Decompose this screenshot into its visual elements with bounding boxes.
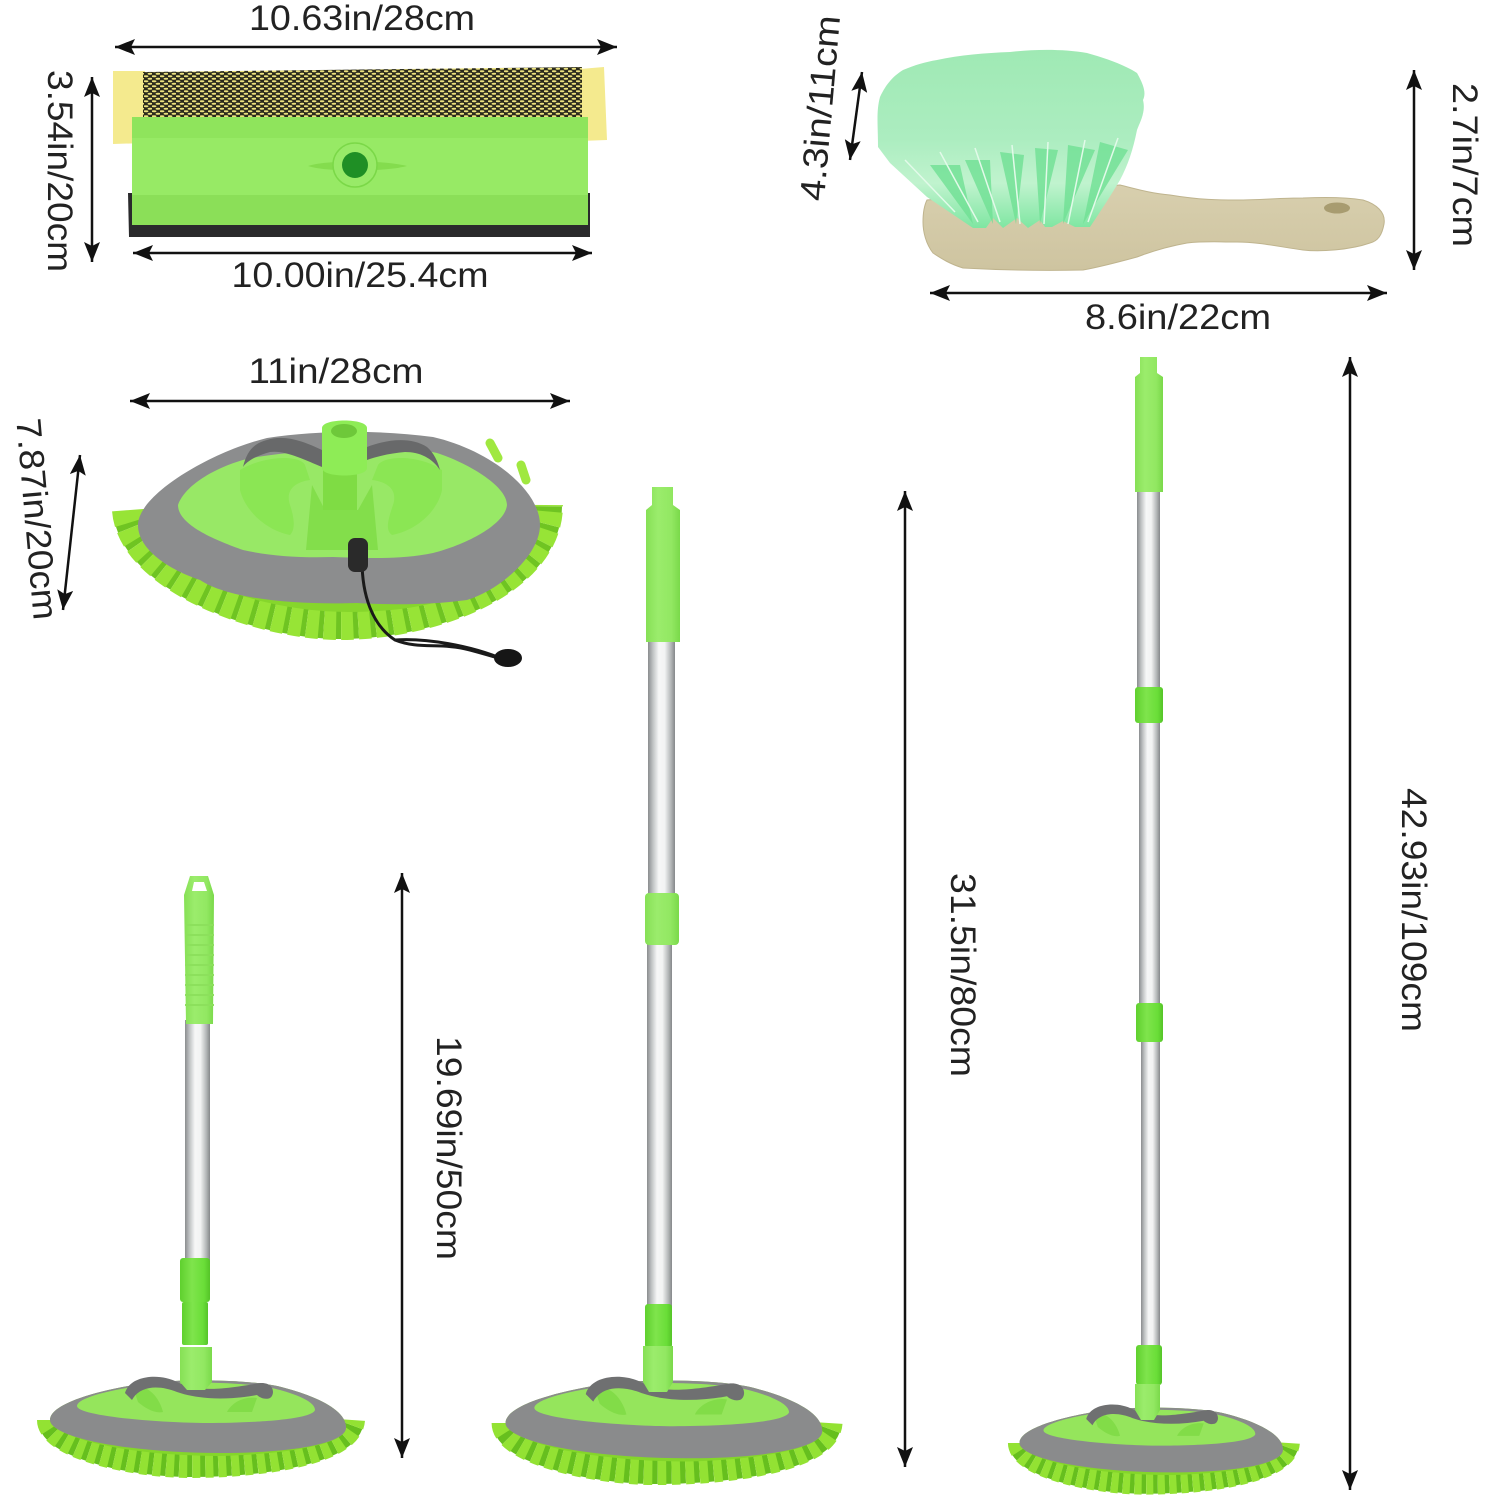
connector lower <box>323 470 357 510</box>
arrow: brush length <box>930 292 1387 294</box>
arrow: medium length <box>904 491 906 1467</box>
silver tube middle <box>1139 720 1160 1005</box>
drawstring cord <box>362 560 505 660</box>
neck <box>643 1346 673 1392</box>
label: squeegee width: 10.63in/28cm <box>249 0 475 38</box>
arrow: bristle height <box>850 72 862 160</box>
chenille base <box>150 540 530 612</box>
grey strap <box>243 438 440 470</box>
label: brush height: 2.7in/7cm <box>1445 83 1484 247</box>
bottom collar <box>1136 1345 1162 1385</box>
neck <box>180 1347 212 1390</box>
label: mop head depth: 7.87in/20cm <box>8 417 65 621</box>
sponge <box>113 67 607 144</box>
grip with loop <box>184 876 214 1024</box>
mop 1: short <box>50 876 352 1465</box>
mop head <box>1020 1405 1288 1483</box>
mop head <box>50 1377 352 1465</box>
silver tube top <box>1137 488 1160 690</box>
arrow: squeegee height <box>91 77 93 262</box>
label: brush length: 8.6in/22cm <box>1085 298 1271 337</box>
arrow: blade width <box>133 252 592 254</box>
panel: flat chenille mop head <box>130 420 545 667</box>
arrow: short length <box>401 873 403 1458</box>
chenille fringe <box>130 505 545 622</box>
label: bristle height: 4.3in/11cm <box>793 14 848 202</box>
label: mop head width: 11in/28cm <box>248 352 424 391</box>
connector hole <box>331 424 357 438</box>
arrow: mop head width <box>130 400 570 402</box>
arrow: mop head depth <box>63 455 80 610</box>
arrow: squeegee width <box>115 46 617 48</box>
green body <box>132 117 588 195</box>
bristle strands <box>905 138 1118 224</box>
upper flange <box>132 117 588 138</box>
stray fringe <box>490 443 526 480</box>
lower collar <box>182 1302 208 1345</box>
cord knot <box>494 649 522 667</box>
silver tube lower <box>647 940 672 1310</box>
handle <box>923 185 1384 270</box>
silver tube <box>648 640 675 900</box>
chenille fringe shadow <box>130 505 545 622</box>
label: medium length: 31.5in/80cm <box>943 873 982 1077</box>
neck <box>1135 1384 1160 1420</box>
mop head <box>506 1377 829 1471</box>
green plate <box>178 449 507 558</box>
label: long length: 42.93in/109cm <box>1394 788 1433 1032</box>
mop 2: medium <box>506 487 829 1471</box>
silver tube lower <box>1141 1040 1160 1348</box>
lower flange <box>132 195 588 225</box>
black rubber blade <box>128 193 590 237</box>
plate raised lobes <box>240 458 442 535</box>
bristles <box>878 50 1144 228</box>
collar <box>645 893 679 945</box>
connector <box>308 143 407 187</box>
plate centre channel <box>306 485 378 550</box>
label: squeegee height: 3.54in/20cm <box>40 70 79 272</box>
arrow: long length <box>1349 357 1351 1490</box>
lower collar <box>645 1304 672 1348</box>
bristle tufts <box>930 142 1128 224</box>
grip <box>646 487 680 642</box>
cord stopper <box>348 538 368 572</box>
label: short length: 19.69in/50cm <box>429 1036 468 1260</box>
label: blade width: 10.00in/25.4cm <box>232 256 488 295</box>
mesh <box>143 67 582 118</box>
grip ribs <box>185 925 214 1005</box>
mop 3: long <box>1020 357 1288 1483</box>
silver tube <box>185 1020 210 1262</box>
handle hole <box>1324 202 1350 214</box>
lower collar <box>1136 1003 1163 1042</box>
connector <box>322 420 367 476</box>
panel: wheel brush <box>878 50 1384 270</box>
collar <box>180 1258 210 1302</box>
arrow: brush height <box>1413 70 1415 270</box>
grey ring <box>138 432 540 604</box>
panel: squeegee sponge head <box>113 67 607 237</box>
upper collar <box>1135 687 1163 723</box>
grip <box>1135 357 1163 492</box>
